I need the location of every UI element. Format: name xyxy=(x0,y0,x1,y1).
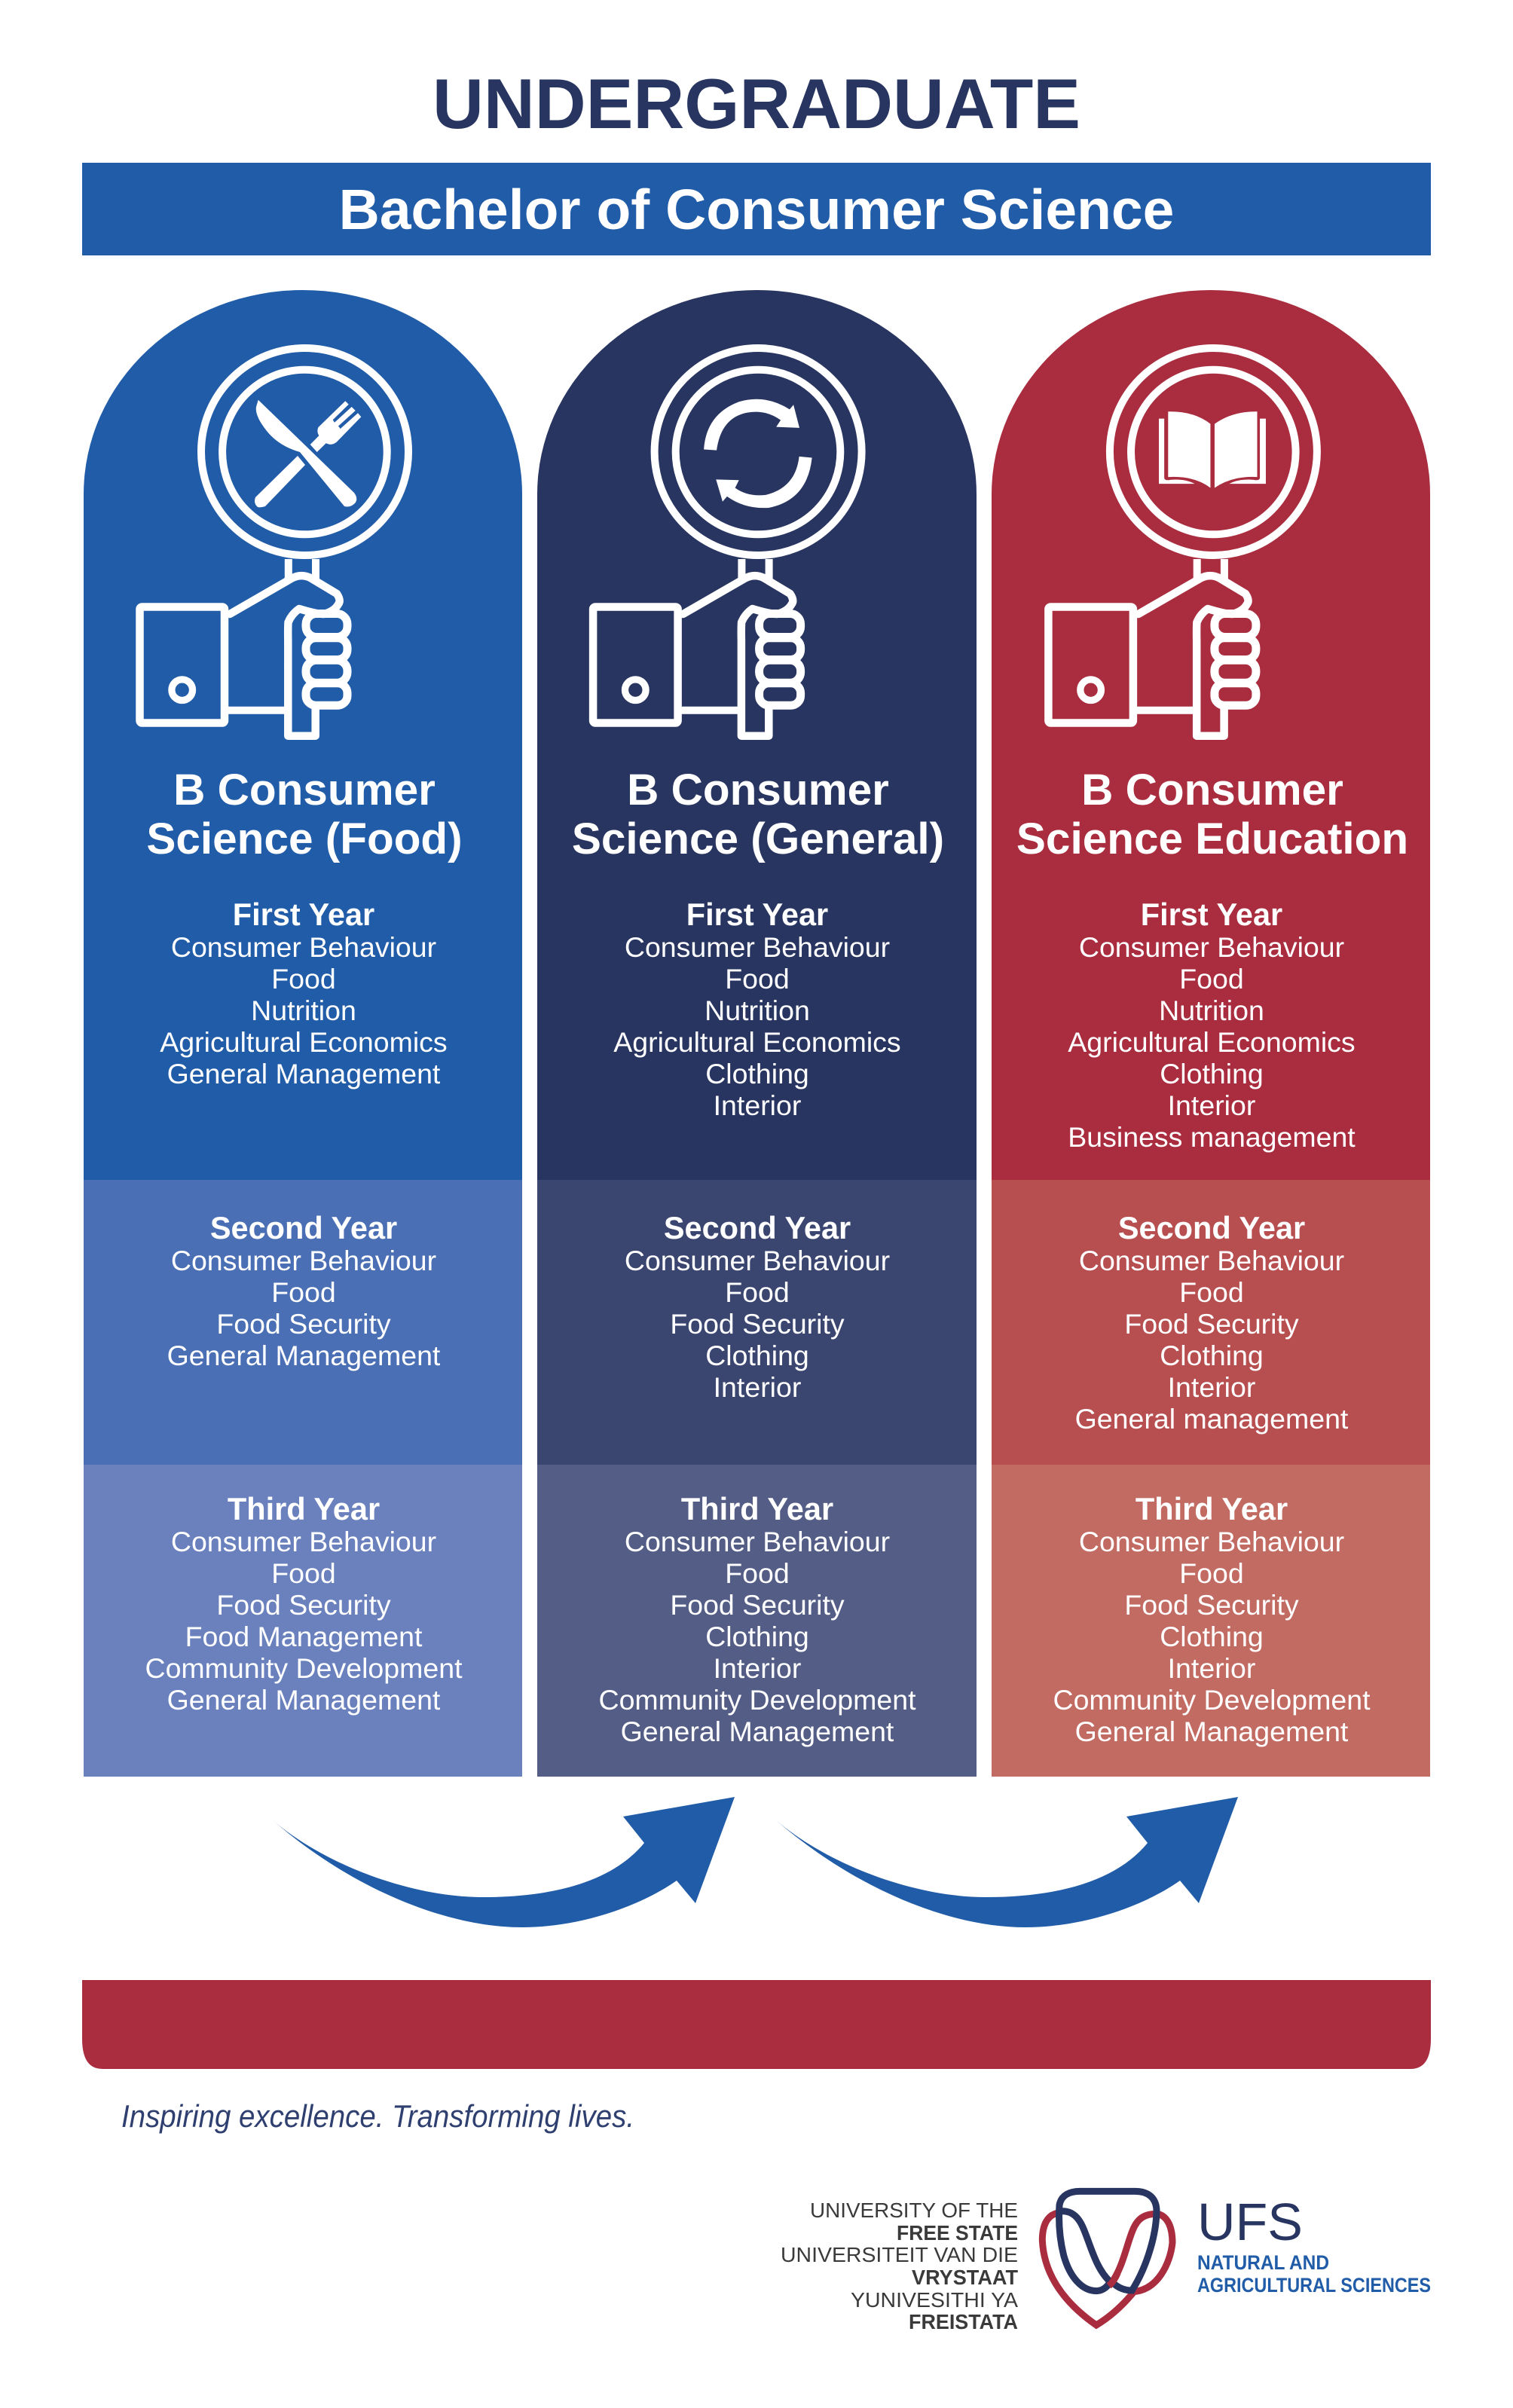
third year list: Food Security xyxy=(670,1589,845,1621)
third year list: Consumer Behaviour xyxy=(1079,1526,1344,1557)
second year list: Consumer Behaviour xyxy=(625,1245,890,1276)
first year list: Interior xyxy=(1168,1089,1255,1121)
third year list: Consumer Behaviour xyxy=(625,1526,890,1557)
heading xyxy=(1016,765,1408,863)
first year list: First Year xyxy=(686,897,828,932)
third year list: General Management xyxy=(621,1716,894,1747)
first year list: General Management xyxy=(167,1058,441,1089)
first year list xyxy=(613,897,901,1121)
third year list: Third Year xyxy=(1136,1491,1288,1526)
third year list: Food xyxy=(271,1557,336,1589)
icon: magnifier with hand and cycle arrows xyxy=(593,348,862,736)
second year list: Consumer Behaviour xyxy=(171,1245,436,1276)
faculty name xyxy=(1197,2251,1431,2296)
university name: UNIVERSITY OF THE xyxy=(810,2199,1018,2222)
third year list: Food xyxy=(1179,1557,1244,1589)
logo: UFS wordmark: UFS xyxy=(1197,2193,1303,2251)
first year list: Nutrition xyxy=(251,995,356,1026)
first year list: Food xyxy=(725,963,790,995)
second year list: Food Security xyxy=(1124,1308,1299,1340)
university name: UNIVERSITEIT VAN DIE xyxy=(781,2243,1018,2266)
banner xyxy=(82,163,1431,255)
third year list xyxy=(145,1491,463,1716)
first year list xyxy=(160,897,448,1089)
third year list: Community Development xyxy=(598,1684,916,1716)
heading: Science (General) xyxy=(572,814,944,863)
third year list: General Management xyxy=(1075,1716,1349,1747)
third year list: Community Development xyxy=(1053,1684,1371,1716)
third year list: Third Year xyxy=(681,1491,833,1526)
second year list: Second Year xyxy=(210,1210,397,1245)
first year list: Agricultural Economics xyxy=(1068,1026,1356,1058)
second year list: Food Security xyxy=(216,1308,391,1340)
faculty name: AGRICULTURAL SCIENCES xyxy=(1197,2274,1431,2296)
second year list: Food xyxy=(271,1276,336,1308)
first year list: Consumer Behaviour xyxy=(1079,931,1344,963)
third year list: General Management xyxy=(167,1684,441,1716)
heading: B Consumer xyxy=(1081,765,1343,814)
logo: UFS shield xyxy=(1042,2191,1172,2325)
second year list xyxy=(167,1210,441,1371)
first year list: Agricultural Economics xyxy=(613,1026,901,1058)
second year list: Clothing xyxy=(705,1340,809,1371)
third year list xyxy=(1053,1491,1371,1747)
third year list xyxy=(598,1491,916,1747)
university name: FREE STATE xyxy=(897,2221,1018,2245)
first year list: First Year xyxy=(1141,897,1282,932)
first year list: Interior xyxy=(714,1089,801,1121)
first year list: Consumer Behaviour xyxy=(625,931,890,963)
first year list: Consumer Behaviour xyxy=(171,931,436,963)
third year list: Consumer Behaviour xyxy=(171,1526,436,1557)
third year list: Food Security xyxy=(216,1589,391,1621)
university name xyxy=(781,2199,1018,2333)
tagline: Inspiring excellence. Transforming lives. xyxy=(121,2098,634,2134)
university name: VRYSTAAT xyxy=(912,2266,1018,2289)
third year list: Food xyxy=(725,1557,790,1589)
second year list: Food Security xyxy=(670,1308,845,1340)
second year list: Interior xyxy=(714,1371,801,1403)
third year list: Food Security xyxy=(1124,1589,1299,1621)
icon: magnifier with hand and open book xyxy=(1048,348,1317,736)
footer bar xyxy=(82,1980,1431,2069)
heading: Science (Food) xyxy=(146,814,463,863)
first year list: Nutrition xyxy=(1159,995,1264,1026)
university name: YUNIVESITHI YA xyxy=(851,2288,1018,2312)
first year list: Agricultural Economics xyxy=(160,1026,448,1058)
second year list xyxy=(1075,1210,1349,1435)
second year list: Food xyxy=(1179,1276,1244,1308)
panel: B Consumer Science (Food) xyxy=(84,290,522,1777)
first year list: Food xyxy=(271,963,336,995)
third year list: Food Management xyxy=(185,1621,423,1652)
heading xyxy=(572,765,944,863)
first year list: Nutrition xyxy=(705,995,810,1026)
heading: B Consumer xyxy=(627,765,889,814)
second year list: General management xyxy=(1075,1403,1349,1435)
faculty name: NATURAL AND xyxy=(1197,2251,1329,2274)
second year list: Second Year xyxy=(664,1210,851,1245)
heading: B Consumer xyxy=(173,765,436,814)
panel: B Consumer Science (General) xyxy=(537,290,977,1777)
heading xyxy=(146,765,463,863)
first year list xyxy=(1068,897,1356,1153)
third year list: Interior xyxy=(714,1652,801,1684)
third year list: Clothing xyxy=(1160,1621,1264,1652)
title: UNDERGRADUATE xyxy=(433,64,1080,143)
banner: Bachelor of Consumer Science xyxy=(339,178,1174,241)
second year list: Interior xyxy=(1168,1371,1255,1403)
first year list: Clothing xyxy=(1160,1058,1264,1089)
second year list: Second Year xyxy=(1118,1210,1305,1245)
arrow: second to third xyxy=(776,1797,1238,1927)
third year list: Community Development xyxy=(145,1652,463,1684)
third year list: Third Year xyxy=(228,1491,380,1526)
second year list: General Management xyxy=(167,1340,441,1371)
arrow: first to second xyxy=(273,1797,735,1927)
third year list: Clothing xyxy=(705,1621,809,1652)
first year list: Food xyxy=(1179,963,1244,995)
heading: Science Education xyxy=(1016,814,1408,863)
first year list: Business management xyxy=(1068,1121,1356,1153)
second year list xyxy=(625,1210,890,1403)
third year list: Interior xyxy=(1168,1652,1255,1684)
icon: magnifier with hand and cutlery xyxy=(140,348,408,736)
second year list: Clothing xyxy=(1160,1340,1264,1371)
university name: FREISTATA xyxy=(909,2310,1018,2333)
second year list: Food xyxy=(725,1276,790,1308)
first year list: First Year xyxy=(233,897,374,932)
panel: B Consumer Science Education xyxy=(992,290,1430,1777)
second year list: Consumer Behaviour xyxy=(1079,1245,1344,1276)
first year list: Clothing xyxy=(705,1058,809,1089)
